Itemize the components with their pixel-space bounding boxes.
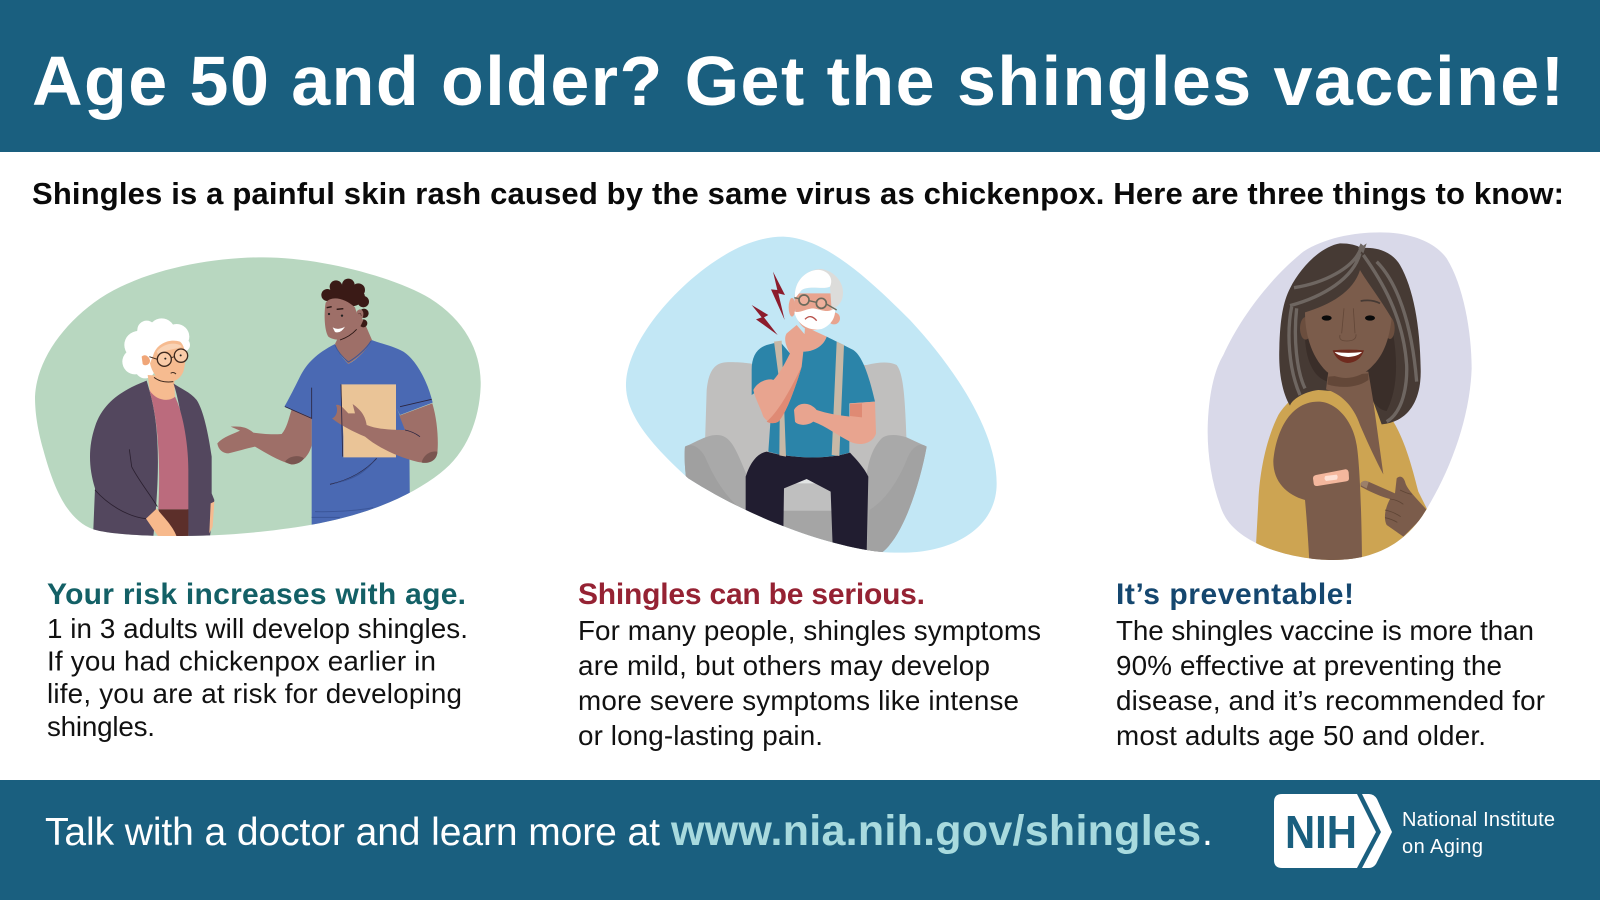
logo: NIH National Institute on Aging <box>1274 794 1555 868</box>
footer banner <box>0 780 1600 900</box>
body text: serious: For many people, shingles symptoms <box>578 615 1041 646</box>
armchair <box>685 362 927 555</box>
panel: preventable <box>1116 232 1545 751</box>
body text: risk <box>47 613 468 742</box>
logo: NIH National Institute on Aging: on Aging <box>1402 836 1483 858</box>
illustration: smiling woman pointing at bandage <box>1208 232 1472 562</box>
call to action: Talk with a doctor and learn more at <box>45 811 660 854</box>
icon: bandage <box>1313 469 1349 486</box>
heading: serious: Shingles can be serious. <box>578 578 925 611</box>
heading: risk: Your risk increases with age. <box>47 578 466 611</box>
woman's neck and face <box>1300 270 1395 474</box>
body text: serious: more severe symptoms like intense <box>578 685 1019 716</box>
title: Age 50 and older? Get the shingles vaccine! <box>32 42 1564 120</box>
body text: preventable: The shingles vaccine is more than <box>1116 615 1534 646</box>
body text: risk: 1 in 3 adults will develop shingles. <box>47 613 468 644</box>
illustration: older man in armchair with neck pain <box>626 237 997 555</box>
call to action <box>45 807 1213 855</box>
body text: serious: are mild, but others may develop <box>578 650 990 681</box>
icon: pain lightning bolts <box>752 272 785 335</box>
body text: risk: shingles. <box>47 711 155 742</box>
body text: risk: If you had chickenpox earlier in <box>47 646 436 676</box>
illustration: older woman talking with nurse <box>35 257 481 537</box>
older woman <box>90 318 214 537</box>
body text: serious <box>578 615 1041 751</box>
body text: serious: or long-lasting pain. <box>578 720 823 751</box>
body text: preventable: disease, and it’s recommended for <box>1116 685 1545 716</box>
intro sentence: Shingles is a painful skin rash caused by the same virus as chickenpox. Here are three things to know: <box>32 176 1564 211</box>
call to action: . <box>1202 811 1213 854</box>
woman's arm <box>1273 402 1362 562</box>
body text: risk: life, you are at risk for developing <box>47 678 462 709</box>
panel: shingles can be serious <box>578 237 1041 751</box>
pointing hand <box>1361 477 1428 537</box>
nurse <box>217 279 438 527</box>
header banner <box>0 0 1600 152</box>
woman's dress <box>1256 385 1428 562</box>
heading: preventable: It’s preventable! <box>1116 578 1354 611</box>
body text: preventable <box>1116 615 1545 751</box>
woman's hair <box>1279 243 1421 424</box>
logo: NIH National Institute on Aging: National Institute <box>1402 809 1555 831</box>
call to action: www.nia.nih.gov/shingles <box>670 807 1201 855</box>
body text: preventable: most adults age 50 and older. <box>1116 720 1486 751</box>
panel: risk increases with age <box>35 257 481 742</box>
man's trousers <box>746 452 868 553</box>
logo: NIH National Institute on Aging: NIH <box>1285 806 1357 858</box>
man's torso and head <box>752 269 876 457</box>
body text: preventable: 90% effective at preventing the <box>1116 650 1502 681</box>
